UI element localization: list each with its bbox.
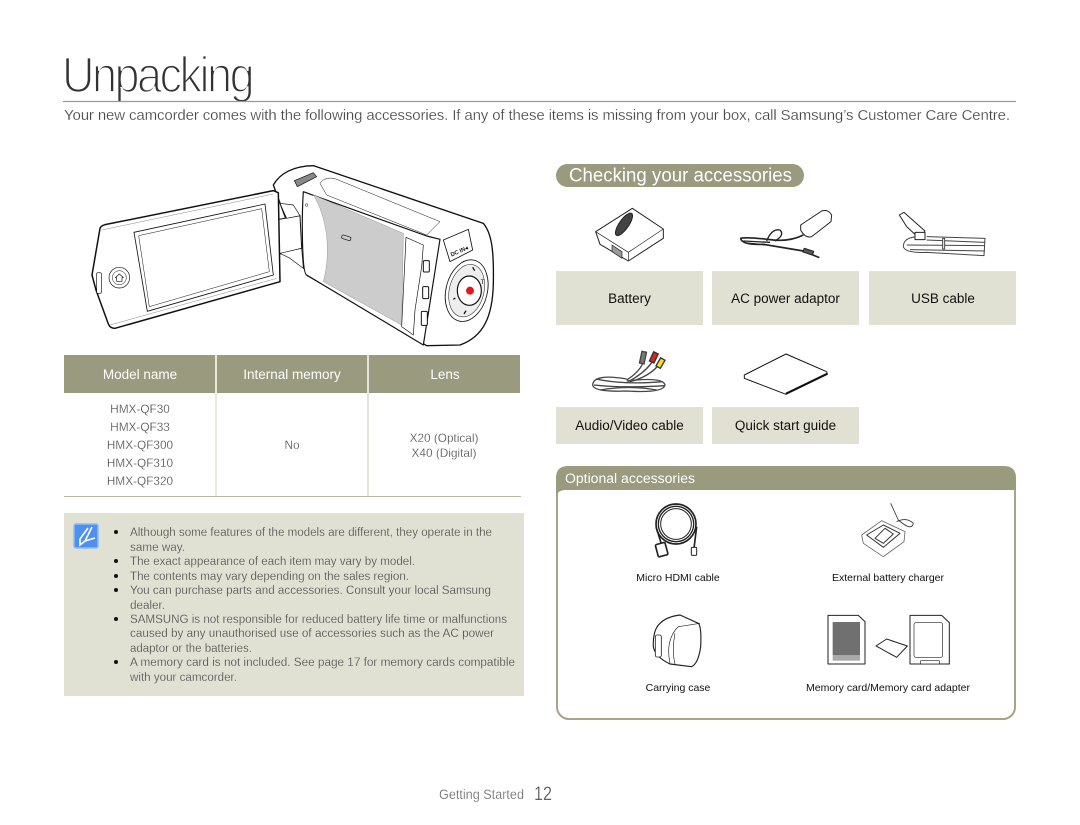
label: audio video cable: Audio/Video cable — [575, 418, 684, 433]
model names: HMX-QF310 — [107, 456, 174, 470]
note text: The exact appearance of each item may vary by model. — [130, 554, 415, 568]
label: AC power adaptor — [712, 271, 859, 325]
icon: note pencil — [74, 524, 98, 548]
model names: HMX-QF33 — [110, 420, 170, 434]
label: audio video cable — [556, 407, 703, 444]
table header: internal memory — [217, 355, 367, 393]
heading: checking your accessories: Checking your accessories — [569, 166, 792, 186]
camcorder illustration: T — [481, 279, 485, 286]
note text — [129, 525, 515, 684]
note text: You can purchase parts and accessories. Consult your local Samsung — [130, 583, 491, 597]
label: memory card: Memory card/Memory card adapter — [806, 682, 970, 694]
footer: section and page number: 12 — [534, 784, 552, 805]
camcorder illustration — [92, 166, 494, 346]
note text: adaptor or the batteries. — [130, 641, 252, 655]
title: Unpacking — [62, 48, 255, 104]
model names: HMX-QF30 — [110, 402, 170, 416]
note text: same way. — [130, 540, 185, 554]
panel header: Optional accessories — [565, 471, 695, 486]
label: battery — [556, 271, 703, 325]
table header: lens — [369, 355, 520, 393]
label: USB cable: USB cable — [911, 291, 975, 306]
label: quick start guide — [712, 407, 859, 444]
icon: memory cards — [828, 615, 949, 664]
label: quick start guide: Quick start guide — [735, 418, 836, 433]
note text: The contents may vary depending on the sales region. — [130, 569, 409, 583]
icon: quick start guide — [744, 354, 827, 394]
label: AC power adaptor: AC power adaptor — [731, 291, 840, 306]
icon: AC power adaptor — [741, 210, 832, 258]
label: USB cable — [869, 271, 1016, 325]
model names: HMX-QF320 — [107, 474, 174, 488]
panel: included accessories — [556, 208, 1016, 444]
footer: section and page number — [439, 784, 552, 805]
icon: carrying case — [653, 615, 701, 667]
note text: with your camcorder. — [129, 670, 237, 684]
note text: caused by any unauthorised use of accessories such as the AC power — [130, 626, 494, 640]
label: carrying case: Carrying case — [646, 682, 711, 694]
note text: Although some features of the models are different, they operate in the — [130, 525, 492, 539]
icon: battery — [596, 208, 663, 261]
panel: optional accessories — [556, 466, 1016, 719]
table header: model name — [64, 355, 215, 393]
table header: internal memory: Internal memory — [243, 367, 341, 382]
note bullets — [114, 530, 118, 664]
table header: lens: Lens — [430, 367, 460, 382]
panel header — [556, 466, 1016, 496]
footer: section and page number: Getting Started — [439, 787, 524, 802]
note text: dealer. — [130, 598, 165, 612]
icon: external battery charger — [862, 503, 913, 557]
internal memory value: No — [284, 438, 300, 452]
camcorder illustration: DC IN◂ — [450, 245, 470, 258]
table: models — [64, 355, 521, 496]
note panel — [64, 513, 524, 696]
label: micro HDMI cable: Micro HDMI cable — [636, 572, 720, 584]
icon: micro HDMI cable — [655, 504, 697, 557]
model names: HMX-QF300 — [107, 438, 174, 452]
lens values: X20 (Optical) — [410, 431, 478, 445]
intro text: Your new camcorder comes with the following accessories. If any of these items is missing from your box, call Samsung’s Customer Care Centre. — [64, 107, 1010, 124]
icon: USB cable — [899, 212, 985, 256]
label: external battery charger: External battery charger — [832, 572, 945, 584]
lens values: X40 (Digital) — [412, 446, 477, 460]
lens values — [410, 431, 478, 460]
model names — [107, 402, 174, 488]
note text: SAMSUNG is not responsible for reduced battery life time or malfunctions — [130, 612, 507, 626]
note text: A memory card is not included. See page 17 for memory cards compatible — [130, 655, 515, 669]
label: battery: Battery — [608, 291, 651, 306]
table header: model name: Model name — [103, 367, 177, 382]
icon: audio video cable — [593, 351, 665, 392]
